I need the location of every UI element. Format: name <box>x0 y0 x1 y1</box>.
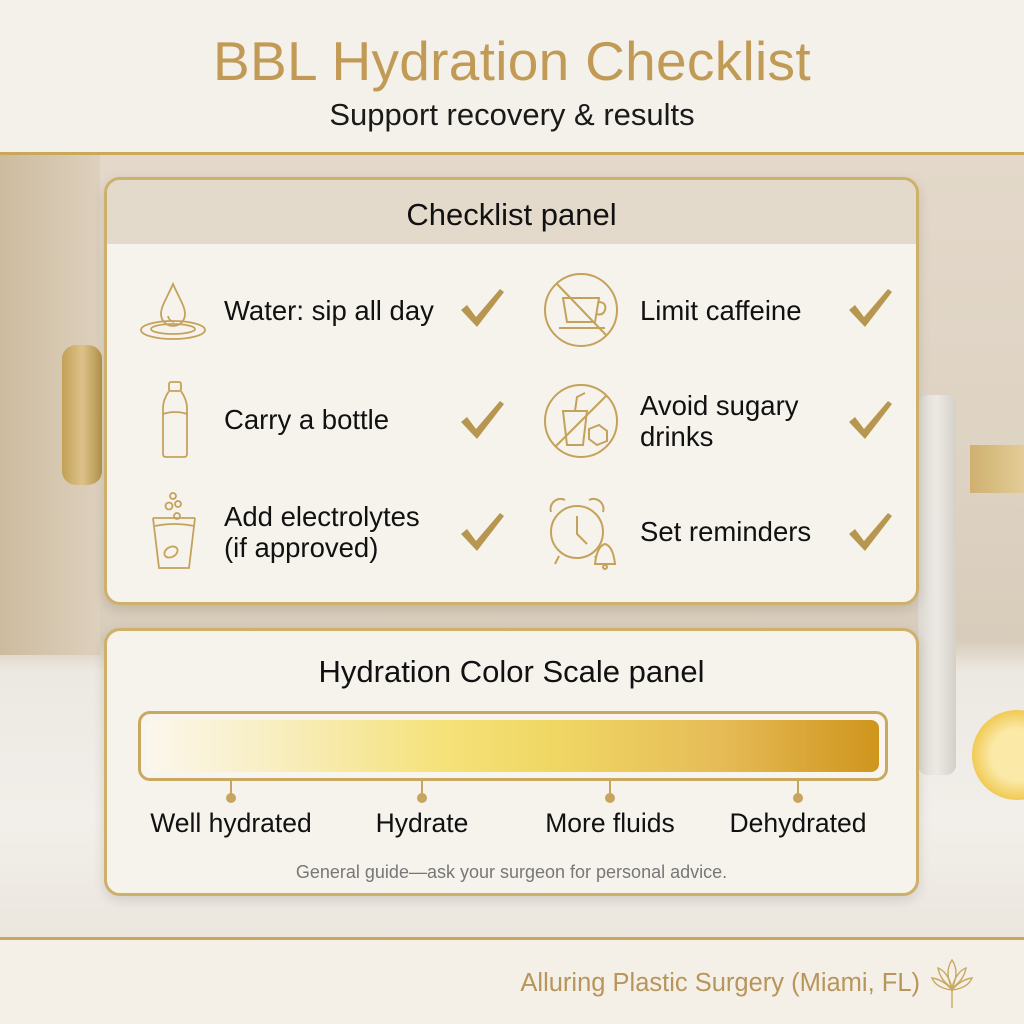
decor: water bottle <box>918 395 956 775</box>
panel: hydration color scale <box>104 628 919 896</box>
scale labels: More fluids <box>545 808 675 838</box>
check 5 <box>849 401 892 439</box>
item: sugary drinks: Avoid sugary <box>640 390 798 421</box>
icon: glass with tablet <box>152 492 196 569</box>
item: sugary drinks: drinks <box>640 421 713 452</box>
footer brand: Alluring Plastic Surgery (Miami, FL) <box>520 969 920 997</box>
item: electrolytes: Add electrolytes <box>224 501 420 532</box>
item: electrolytes: (if approved) <box>224 532 378 563</box>
icon: water drop <box>140 282 206 340</box>
title: BBL Hydration Checklist <box>213 30 811 92</box>
scale labels: Dehydrated <box>729 808 867 838</box>
icon: no soda <box>544 384 618 458</box>
icon: no coffee <box>544 273 618 347</box>
background photo area <box>0 152 1024 940</box>
item: water: Water: sip all day <box>224 295 434 326</box>
panel header <box>107 180 916 244</box>
check 2 <box>461 401 504 439</box>
icon: alarm clock <box>550 498 616 570</box>
item: water <box>140 282 434 340</box>
scale heading: Hydration Color Scale panel <box>318 654 704 689</box>
header band <box>0 0 1024 152</box>
gradient bar <box>138 711 888 781</box>
scale labels <box>150 808 867 838</box>
icon: bottle <box>162 381 188 458</box>
check 1 <box>461 289 504 327</box>
item: caffeine: Limit caffeine <box>640 295 802 326</box>
icon: lotus <box>931 958 973 1008</box>
check 3 <box>461 513 504 551</box>
decor: lemon <box>972 710 1024 800</box>
panel header: Checklist panel <box>406 197 617 232</box>
check 4 <box>849 289 892 327</box>
item: bottle <box>162 381 389 458</box>
decor: gold vase <box>62 345 102 485</box>
decor: gold cup <box>970 445 1024 493</box>
disclaimer: General guide—ask your surgeon for personal advice. <box>296 862 727 882</box>
item: caffeine <box>544 273 802 347</box>
check 6 <box>849 513 892 551</box>
subtitle: Support recovery & results <box>329 97 695 132</box>
item: reminders: Set reminders <box>640 516 811 547</box>
item: electrolytes <box>152 492 420 569</box>
scale labels: Well hydrated <box>150 808 312 838</box>
item: reminders <box>550 498 811 570</box>
panel: checklist <box>104 177 919 605</box>
item: bottle: Carry a bottle <box>224 404 389 435</box>
tick markers <box>226 781 803 803</box>
item: sugary drinks <box>544 384 798 458</box>
scale labels: Hydrate <box>376 808 468 838</box>
